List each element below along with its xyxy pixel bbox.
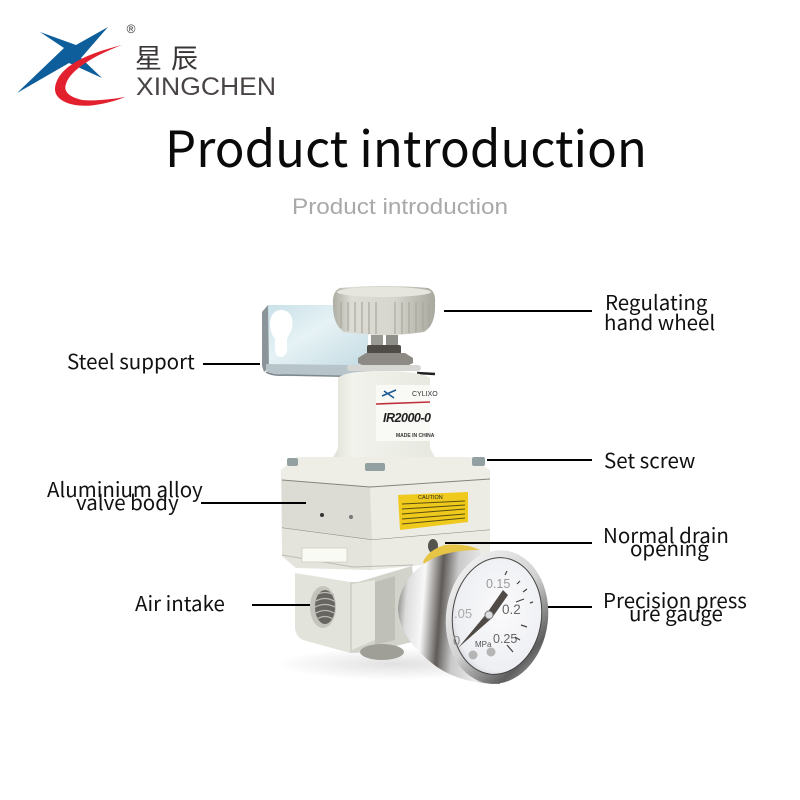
label: precision pressure gauge [548, 584, 747, 627]
screws [287, 457, 485, 471]
logo latin name: XINGCHEN [136, 73, 276, 101]
label: set screw: Set screw [604, 444, 695, 474]
icon: red crescent [55, 45, 125, 106]
label: precision pressure gauge: Precision press [603, 584, 747, 614]
neck cylinder with label: IR2000-0 [383, 411, 431, 425]
label: regulating hand wheel: Regulating [605, 286, 708, 316]
pressure gauge [398, 544, 556, 690]
yellow plug and drain [423, 539, 480, 572]
subtitle: Product introduction [292, 194, 508, 219]
label: aluminium alloy valve body: Aluminium alloy [47, 473, 203, 503]
label: regulating hand wheel [444, 286, 715, 336]
registered mark: ® [127, 22, 136, 36]
gauge scale: 0.2 [502, 602, 521, 617]
product: precision regulator [262, 286, 556, 690]
caution sticker: CAUTION [418, 495, 443, 501]
logo [17, 22, 276, 106]
label: normal drain opening: Normal drain [603, 519, 729, 549]
label: steel support: Steel support [67, 345, 195, 375]
stem and nut [347, 335, 435, 374]
label: air intake: Air intake [135, 587, 225, 617]
gauge needle [458, 590, 508, 648]
label: normal drain opening [445, 519, 729, 562]
label: normal drain opening: opening [630, 532, 709, 562]
gauge scale: .05 [454, 606, 472, 621]
label: regulating hand wheel: hand wheel [604, 306, 715, 336]
neck cylinder with label: MADE IN CHINA [396, 433, 435, 439]
hand wheel knob [333, 286, 435, 335]
icon: blue star cross [17, 27, 108, 93]
gauge scale [453, 577, 521, 649]
label: aluminium alloy valve body [47, 473, 306, 516]
gauge scale: 0 [453, 633, 460, 648]
caution sticker [398, 492, 468, 530]
steel bracket [262, 305, 378, 377]
gauge scale: 0.15 [486, 577, 510, 591]
label: aluminium alloy valve body: valve body [76, 486, 179, 516]
label: precision pressure gauge: ure gauge [629, 597, 723, 627]
logo chinese name: 星辰 [135, 44, 207, 74]
air intake block and port [295, 566, 420, 660]
aluminium valve body [281, 457, 490, 570]
product label [376, 385, 430, 441]
neck cylinder with label: CYLIXO [412, 391, 438, 398]
gauge scale: MPa [475, 640, 492, 649]
ground shadow [275, 648, 515, 680]
gauge scale: 0.25 [493, 632, 517, 646]
neck cylinder with label [322, 371, 442, 470]
title: Product introduction [165, 110, 647, 182]
